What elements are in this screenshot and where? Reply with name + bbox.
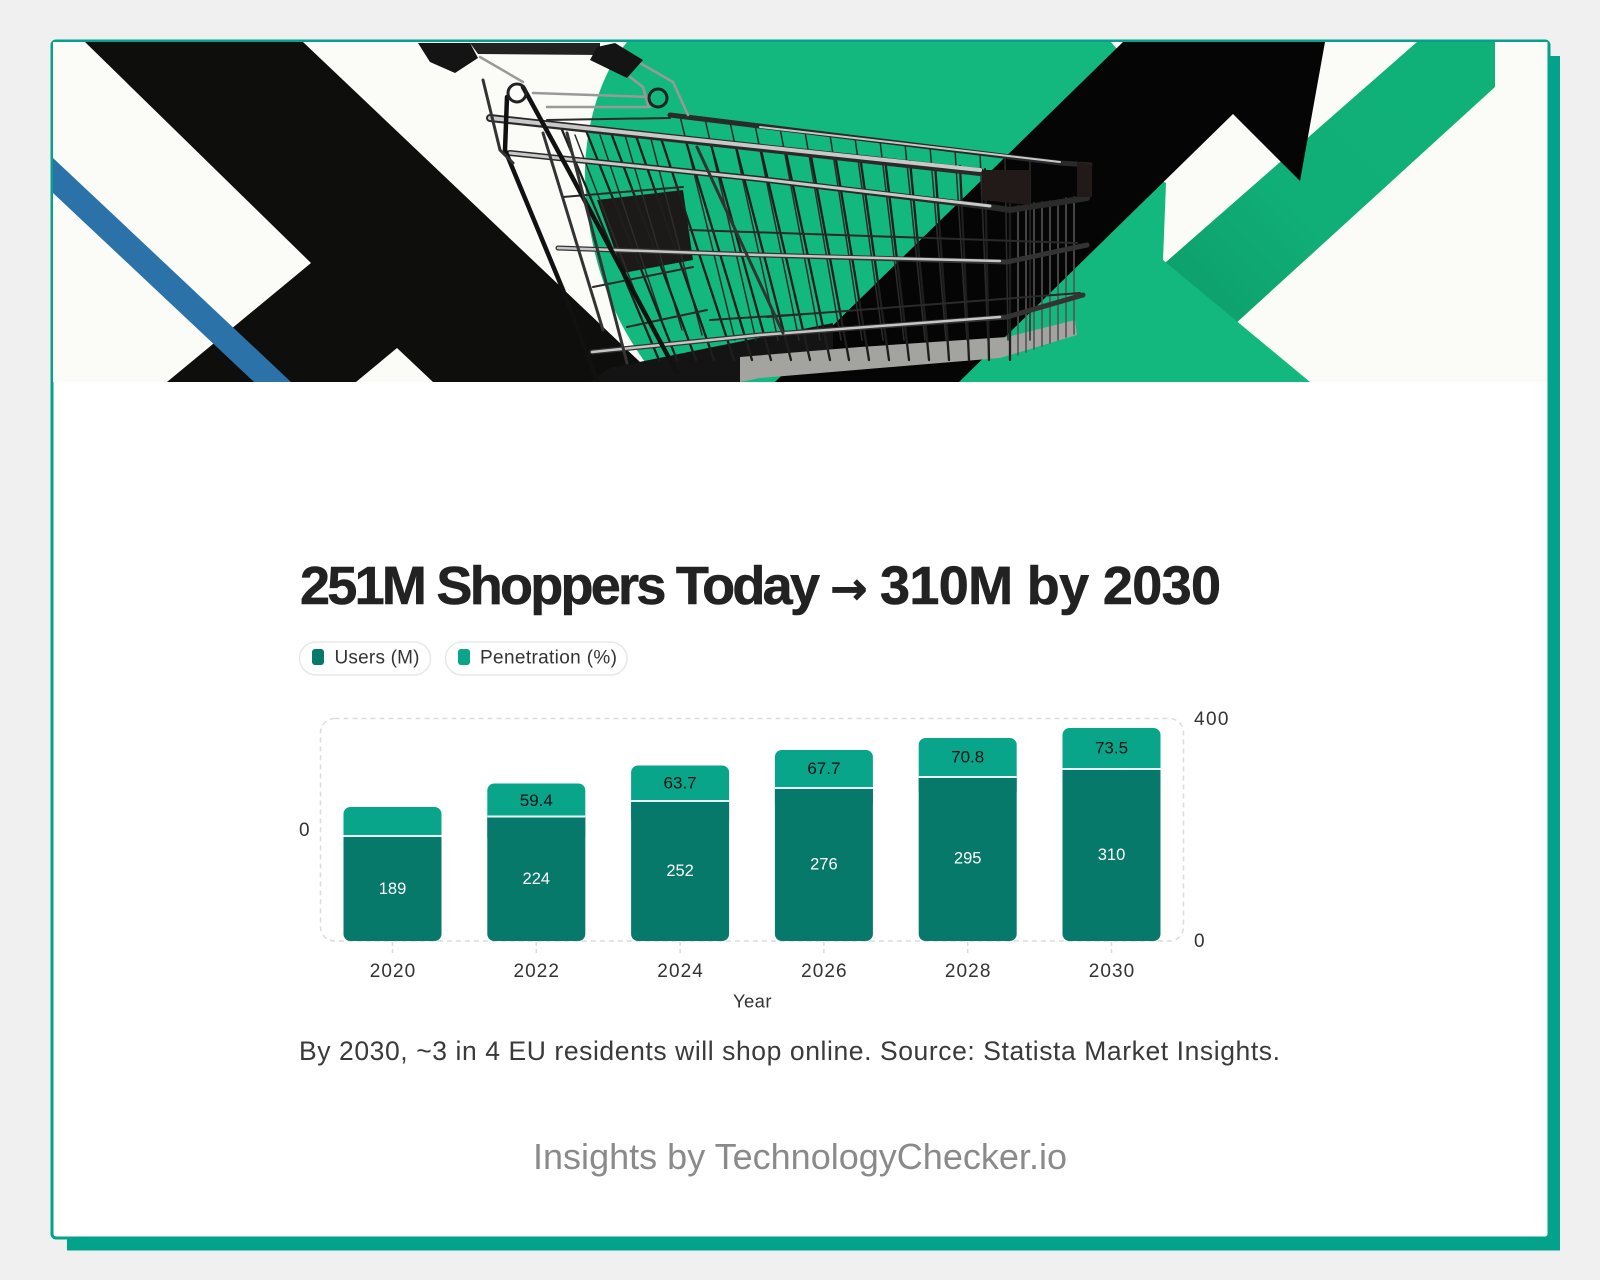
stacked bar chart bbox=[299, 709, 1228, 1012]
bar 2020: 189 bbox=[379, 880, 406, 898]
bar 2030: 73.5 bbox=[1095, 738, 1128, 758]
cart handle bbox=[418, 43, 478, 73]
green circular field bbox=[585, 42, 1117, 382]
bar 2026: 67.7 bbox=[807, 759, 840, 778]
y axis labels: 0 bbox=[299, 820, 310, 841]
x axis year labels bbox=[370, 961, 1134, 982]
lower rails bbox=[558, 245, 1087, 262]
back wires bbox=[575, 116, 1030, 340]
bar 2026: 276 bbox=[810, 856, 838, 874]
legend item: users: Users (M) bbox=[334, 648, 420, 668]
cart hinge right bbox=[649, 89, 667, 107]
black diagonal shape bbox=[85, 42, 661, 382]
legend item: users bbox=[300, 642, 430, 675]
bar 2020 bbox=[344, 807, 442, 941]
x axis year labels: 2024 bbox=[657, 961, 703, 982]
cart tray bbox=[740, 320, 1077, 382]
title: 310M by 2030 bbox=[880, 556, 1221, 616]
bar 2022: 224 bbox=[523, 870, 550, 888]
x axis title: Year bbox=[733, 990, 772, 1012]
bar 2022: 59.4 bbox=[520, 791, 553, 810]
black rising arrow bbox=[775, 42, 1325, 382]
x axis year labels: 2026 bbox=[801, 961, 847, 982]
cart frame posts bbox=[505, 87, 677, 380]
legend item: penetration bbox=[446, 642, 627, 675]
bar 2028: 70.8 bbox=[951, 748, 984, 766]
bar 2030: 310 bbox=[1098, 846, 1125, 864]
cart seat bbox=[597, 190, 693, 273]
side wires bbox=[1018, 197, 1074, 355]
upper rails bbox=[670, 115, 1090, 165]
bar 2030 bbox=[1062, 728, 1160, 941]
bar 2028 bbox=[919, 738, 1017, 941]
shopping cart bbox=[418, 43, 1092, 382]
bar 2028: 295 bbox=[954, 850, 981, 868]
y axis labels: 400 bbox=[1194, 709, 1228, 730]
bar 2024 bbox=[631, 766, 729, 941]
bar 2024: 252 bbox=[666, 862, 694, 880]
legend bbox=[300, 642, 627, 675]
footer attribution: Insights by TechnologyChecker.io bbox=[533, 1136, 1067, 1177]
title: 251M Shoppers Today bbox=[300, 556, 820, 616]
green band bbox=[1160, 42, 1495, 325]
bar 2024: 63.7 bbox=[664, 774, 697, 792]
legend item: penetration: Penetration (%) bbox=[480, 648, 617, 668]
cart corner blocks bbox=[982, 170, 1030, 205]
x axis year labels: 2022 bbox=[514, 961, 559, 982]
cart handle grip bbox=[590, 43, 643, 78]
x axis year labels: 2020 bbox=[370, 961, 415, 982]
blue stripe bbox=[52, 157, 291, 382]
x axis year labels: 2030 bbox=[1089, 961, 1134, 982]
green triangle bbox=[1000, 182, 1310, 382]
caption: By 2030, ~3 in 4 EU residents will shop online. Source: Statista Market Insights. bbox=[299, 1036, 1280, 1066]
cart corner block right bbox=[1077, 162, 1092, 197]
y axis labels: 0 bbox=[1194, 931, 1205, 952]
horizontal grid wires bbox=[547, 118, 1080, 327]
bar 2022 bbox=[487, 784, 585, 941]
title bbox=[300, 556, 1221, 616]
cart hinges bbox=[508, 84, 526, 102]
cart base shadow bbox=[640, 323, 833, 382]
front wires bbox=[560, 125, 1010, 360]
hero illustration: shopping cart with rising arrow bbox=[52, 42, 1548, 382]
y axis labels bbox=[299, 709, 1228, 952]
bar 2026 bbox=[775, 750, 873, 941]
x axis year labels: 2028 bbox=[945, 961, 990, 982]
cart handle bar bbox=[470, 43, 600, 55]
title: → bbox=[830, 562, 868, 615]
